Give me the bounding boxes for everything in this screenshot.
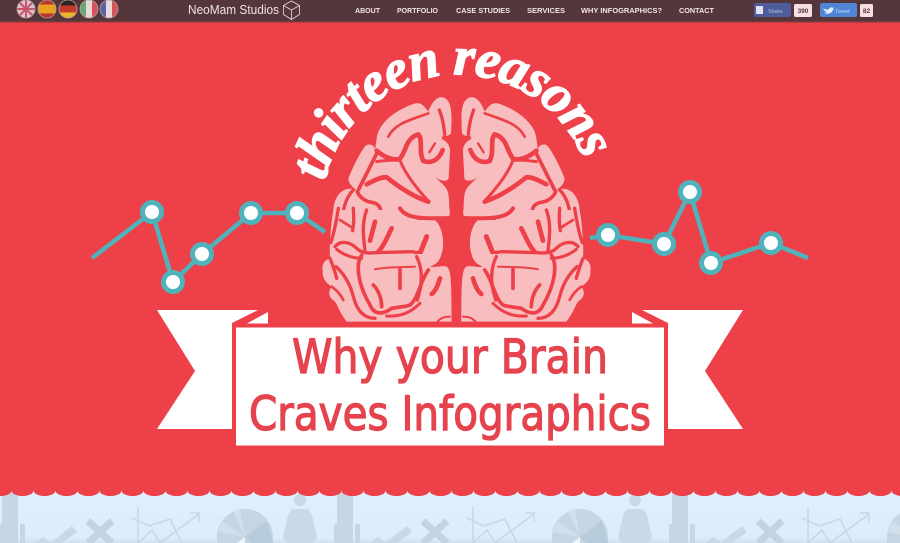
- banner panel: [234, 326, 666, 448]
- navigation bar: [0, 0, 900, 22]
- menu: PORTFOLIO: [397, 6, 438, 15]
- title: Craves Infographics: [249, 387, 651, 442]
- ribbon tail left: [157, 310, 258, 429]
- arched heading: thirteen reasons: thirteen reasons: [294, 48, 607, 179]
- logo: NeoMam Studios: [188, 3, 279, 17]
- menu: [355, 6, 715, 15]
- social buttons: Share: [768, 9, 783, 15]
- menu: ABOUT: [355, 6, 381, 15]
- ribbon banner: [157, 310, 743, 448]
- footer band with chart icons: [0, 480, 900, 543]
- menu: SERVICES: [527, 6, 565, 15]
- title: [249, 330, 651, 442]
- menu: CASE STUDIES: [456, 6, 510, 15]
- social buttons: 390: [798, 8, 809, 15]
- social buttons: Tweet: [835, 9, 850, 15]
- ribbon tail right: [642, 310, 743, 429]
- menu: WHY INFOGRAPHICS?: [581, 6, 662, 15]
- ribbon folds: [246, 312, 654, 324]
- social buttons: [754, 3, 873, 17]
- right line chart: [590, 182, 808, 272]
- brain: [322, 97, 591, 323]
- flags: [16, 0, 119, 19]
- menu: CONTACT: [679, 6, 715, 15]
- social buttons: 82: [863, 8, 870, 15]
- logo: [188, 1, 300, 20]
- left line chart: [92, 202, 325, 292]
- title: Why your Brain: [292, 330, 608, 385]
